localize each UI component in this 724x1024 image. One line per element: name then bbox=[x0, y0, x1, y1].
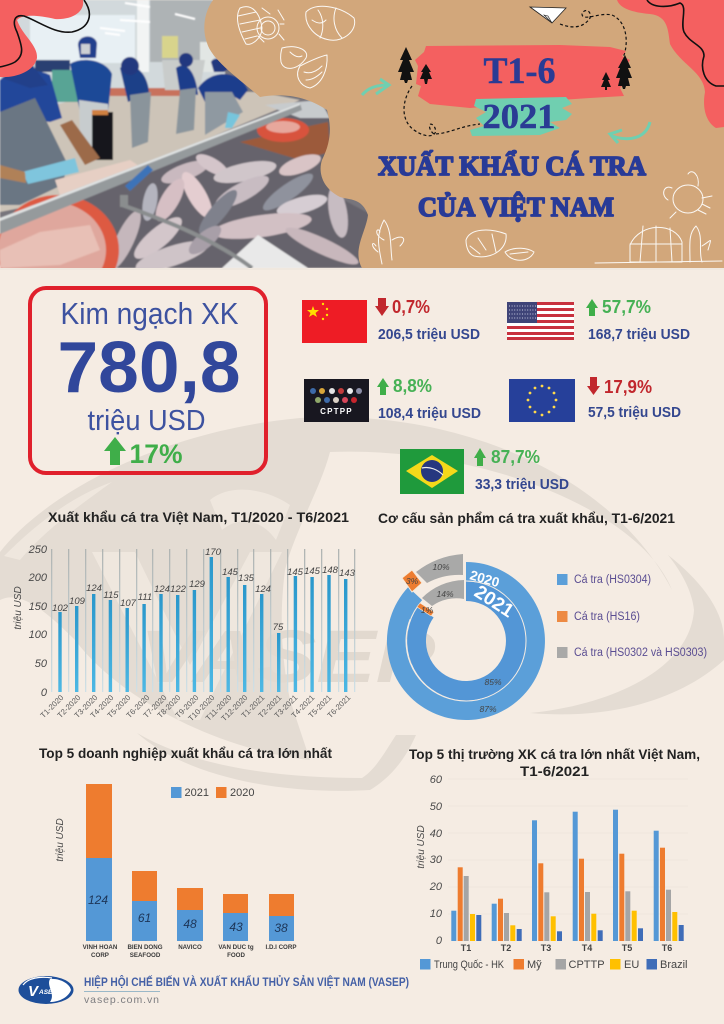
grouped bar chart: top 5 markets: 50 bbox=[430, 801, 443, 813]
paper plane bbox=[530, 7, 566, 23]
market: USA: 168,7 triệu USD bbox=[588, 327, 690, 343]
market: EU bbox=[509, 377, 681, 422]
legend: product structure: Cá tra (HS0304) bbox=[574, 574, 651, 586]
market: China: 206,5 triệu USD bbox=[378, 327, 480, 343]
dashed flight path left bbox=[404, 86, 480, 136]
column chart: monthly exports: 145 bbox=[287, 567, 304, 578]
grouped bar chart: top 5 markets: T2 bbox=[501, 943, 511, 953]
grouped bar chart: top 5 markets: EU bbox=[624, 959, 639, 971]
column chart: monthly exports: 111 bbox=[138, 592, 152, 603]
column chart: monthly exports: T10-2020 bbox=[186, 693, 217, 723]
stacked bar chart: top 5 companies: NAVICO bbox=[178, 944, 202, 951]
header beige background shape bbox=[204, 0, 724, 268]
column chart: monthly exports bbox=[13, 544, 356, 723]
footer: website: vasep.com.vn bbox=[84, 994, 159, 1006]
column chart: monthly exports: 122 bbox=[170, 584, 187, 595]
red blob top right bbox=[617, 0, 724, 128]
grouped bar chart: top 5 markets: T1 bbox=[461, 943, 471, 953]
donut chart: product structure: 85% bbox=[484, 677, 502, 687]
stacked bar chart: top 5 companies: 61 bbox=[138, 911, 151, 925]
stacked bar chart: top 5 companies: I.D.I CORP bbox=[266, 944, 296, 951]
column chart: monthly exports: 0 bbox=[41, 687, 48, 699]
sea doodles bottom bbox=[372, 172, 722, 264]
header title: XUẤT KHẨU CÁ TRA: XUẤT KHẨU CÁ TRA bbox=[378, 150, 646, 181]
panel: total export value bbox=[30, 288, 266, 473]
grouped bar chart: top 5 markets: 40 bbox=[430, 828, 443, 840]
red brush stroke bbox=[415, 45, 630, 108]
column chart: monthly exports: T5-2021 bbox=[307, 693, 333, 720]
mint brush stroke bbox=[470, 97, 572, 136]
header photo: fish processing workers bbox=[0, 0, 368, 268]
column chart: monthly exports: 124 bbox=[154, 584, 170, 595]
grouped bar chart: top 5 markets: T4 bbox=[582, 943, 592, 953]
sea doodles top bbox=[238, 6, 355, 88]
column chart: monthly exports: T2-2020 bbox=[56, 693, 83, 720]
column chart: monthly exports: 148 bbox=[322, 565, 339, 576]
grouped bar chart: top 5 markets: CPTTP bbox=[568, 959, 605, 971]
pine trees left bbox=[398, 47, 432, 84]
column chart: monthly exports: T8-2020 bbox=[156, 693, 183, 720]
column chart: monthly exports: T12-2020 bbox=[219, 693, 250, 723]
column chart: monthly exports: T11-2020 bbox=[204, 693, 234, 723]
column chart: monthly exports: 107 bbox=[120, 598, 137, 609]
grouped bar chart: top 5 markets: T3 bbox=[541, 943, 551, 953]
donut chart: product structure: 14% bbox=[436, 589, 454, 599]
grouped bar chart: top 5 markets: Brazil bbox=[660, 959, 688, 971]
column chart: monthly exports: 135 bbox=[238, 573, 255, 584]
column chart: monthly exports: T7-2020 bbox=[142, 693, 169, 720]
panel: total export value: triệu USD bbox=[88, 405, 206, 437]
black squiggle top left bbox=[0, 0, 89, 67]
donut chart: product structure: 2021 bbox=[470, 582, 518, 622]
column chart: monthly exports: 143 bbox=[339, 568, 356, 579]
column chart: monthly exports: 75 bbox=[273, 622, 284, 633]
heading: top 5 markets bbox=[409, 746, 700, 779]
column chart: monthly exports: T1-2020 bbox=[39, 693, 66, 720]
market: Brazil: 87,7% bbox=[491, 447, 540, 467]
legend: product structure: Cá tra (HS0302 và HS0303) bbox=[574, 647, 707, 659]
column chart: monthly exports: T1-2021 bbox=[240, 693, 266, 720]
grouped bar chart: top 5 markets: 20 bbox=[429, 881, 443, 893]
legend: product structure bbox=[557, 574, 707, 659]
footer: VASEP logo: V bbox=[28, 983, 40, 1000]
column chart: monthly exports: 145 bbox=[222, 567, 239, 578]
market: EU: 17,9% bbox=[604, 377, 652, 397]
grouped bar chart: top 5 markets: 60 bbox=[430, 774, 443, 786]
mint arrow left bbox=[362, 79, 389, 95]
header title: CỦA VIỆT NAM: CỦA VIỆT NAM bbox=[418, 192, 614, 222]
market: China bbox=[302, 297, 480, 343]
market: CPTPP: 8,8% bbox=[393, 376, 432, 396]
column chart: monthly exports: T3-2020 bbox=[73, 693, 100, 720]
heading: top 5 markets: T1-6/2021 bbox=[520, 763, 589, 779]
column chart: monthly exports: triệu USD bbox=[13, 586, 24, 630]
panel: total export value: 780,8 bbox=[58, 328, 241, 408]
stacked bar chart: top 5 companies: 43 bbox=[229, 920, 243, 934]
column chart: monthly exports: T6-2020 bbox=[125, 693, 152, 720]
heading: monthly export chart: Xuất khẩu cá tra Việt Nam, T1/2020 - T6/2021 bbox=[48, 509, 349, 525]
column chart: monthly exports: T6-2021 bbox=[326, 693, 352, 720]
column chart: monthly exports: 100 bbox=[29, 629, 48, 641]
column chart: monthly exports: T5-2020 bbox=[106, 693, 133, 720]
stacked bar chart: top 5 companies: 2021 bbox=[184, 787, 209, 799]
stacked bar chart: top 5 companies: CORP bbox=[91, 952, 109, 959]
market: CPTPP: CPTPP bbox=[320, 407, 353, 416]
column chart: monthly exports: 129 bbox=[189, 579, 206, 590]
watermark: VASEP logo bbox=[0, 417, 724, 791]
market: China: 0,7% bbox=[392, 297, 430, 317]
black squiggle top right bbox=[647, 0, 724, 86]
grouped bar chart: top 5 markets: T5 bbox=[622, 943, 632, 953]
column chart: monthly exports: 200 bbox=[28, 572, 48, 584]
grouped bar chart: top 5 markets bbox=[416, 774, 688, 971]
grouped bar chart: top 5 markets: 10 bbox=[430, 908, 443, 920]
stacked bar chart: top 5 companies: 48 bbox=[183, 917, 197, 931]
grouped bar chart: top 5 markets: 30 bbox=[430, 854, 443, 866]
column chart: monthly exports: 145 bbox=[304, 566, 321, 577]
market: Brazil: 33,3 triệu USD bbox=[475, 477, 569, 493]
legend: product structure: Cá tra (HS16) bbox=[574, 611, 640, 623]
donut chart: product structure: 1% bbox=[421, 605, 434, 615]
watermark: VASEP logo: VASEP bbox=[140, 615, 436, 698]
column chart: monthly exports: 124 bbox=[86, 583, 102, 594]
stacked bar chart: top 5 companies: 2020 bbox=[230, 787, 254, 799]
stacked bar chart: top 5 companies: BIEN DONG bbox=[127, 944, 163, 951]
market: CPTPP bbox=[304, 376, 481, 422]
market: USA bbox=[507, 297, 690, 343]
red blob top left bbox=[0, 0, 83, 77]
market: CPTPP: 108,4 triệu USD bbox=[378, 406, 481, 422]
dashed flight path right bbox=[560, 11, 626, 68]
donut chart: product structure: 10% bbox=[432, 562, 450, 572]
stacked bar chart: top 5 companies bbox=[55, 784, 296, 959]
column chart: monthly exports: 102 bbox=[52, 603, 69, 614]
footer: VASEP logo: ASEP bbox=[38, 989, 57, 996]
stacked bar chart: top 5 companies: triệu USD bbox=[55, 818, 66, 862]
donut chart: product structure bbox=[387, 554, 545, 720]
column chart: monthly exports: 115 bbox=[103, 590, 119, 601]
column chart: monthly exports: T3-2021 bbox=[273, 693, 299, 720]
mint arrow right bbox=[610, 122, 650, 143]
heading: top 5 markets: Top 5 thị trường XK cá tra lớn nhất Việt Nam, bbox=[409, 746, 700, 762]
column chart: monthly exports: 150 bbox=[29, 601, 48, 613]
header title: 2021: 2021 bbox=[482, 97, 556, 136]
column chart: monthly exports: 109 bbox=[69, 596, 86, 607]
column chart: monthly exports: 170 bbox=[205, 547, 222, 558]
stacked bar chart: top 5 companies: VINH HOAN bbox=[83, 944, 118, 951]
column chart: monthly exports: T9-2020 bbox=[174, 693, 201, 720]
column chart: monthly exports: 250 bbox=[28, 544, 48, 556]
pine trees right bbox=[601, 55, 632, 90]
stacked bar chart: top 5 companies: 124 bbox=[88, 893, 108, 907]
column chart: monthly exports: T4-2020 bbox=[89, 693, 116, 720]
grouped bar chart: top 5 markets: Mỹ bbox=[527, 959, 542, 971]
market: EU: 57,5 triệu USD bbox=[588, 405, 681, 421]
column chart: monthly exports: T2-2021 bbox=[257, 693, 283, 720]
footer: association name: HIỆP HỘI CHẾ BIẾN VÀ XUẤT KHẨU THỦY SẢN VIỆT NAM (VASEP) bbox=[84, 974, 409, 989]
donut chart: product structure: 3% bbox=[406, 576, 419, 586]
stacked bar chart: top 5 companies: VAN DUC tg bbox=[218, 944, 254, 951]
grouped bar chart: top 5 markets: 0 bbox=[436, 935, 443, 947]
panel: total export value: 17% bbox=[130, 439, 182, 469]
stacked bar chart: top 5 companies: FOOD bbox=[227, 952, 245, 959]
heading: top 5 companies: Top 5 doanh nghiệp xuất khẩu cá tra lớn nhất bbox=[39, 745, 332, 761]
grouped bar chart: top 5 markets: triệu USD bbox=[416, 825, 427, 869]
column chart: monthly exports: T4-2021 bbox=[290, 693, 316, 720]
grouped bar chart: top 5 markets: Trung Quốc - HK bbox=[434, 959, 505, 971]
donut chart: product structure: 87% bbox=[479, 704, 497, 714]
column chart: monthly exports: 124 bbox=[255, 584, 271, 595]
header title: T1-6: T1-6 bbox=[484, 51, 556, 92]
stacked bar chart: top 5 companies: 38 bbox=[274, 921, 288, 935]
grouped bar chart: top 5 markets: T6 bbox=[662, 943, 672, 953]
footer: VASEP logo bbox=[18, 976, 74, 1004]
stacked bar chart: top 5 companies: SEAFOOD bbox=[130, 952, 161, 959]
panel: total export value: Kim ngạch XK bbox=[60, 296, 239, 331]
donut chart: product structure: 2020 bbox=[468, 567, 501, 590]
market: Brazil bbox=[400, 447, 569, 494]
heading: product structure: Cơ cấu sản phẩm cá tra xuất khẩu, T1-6/2021 bbox=[378, 510, 675, 526]
market: USA: 57,7% bbox=[602, 297, 651, 317]
column chart: monthly exports: 50 bbox=[35, 658, 48, 670]
